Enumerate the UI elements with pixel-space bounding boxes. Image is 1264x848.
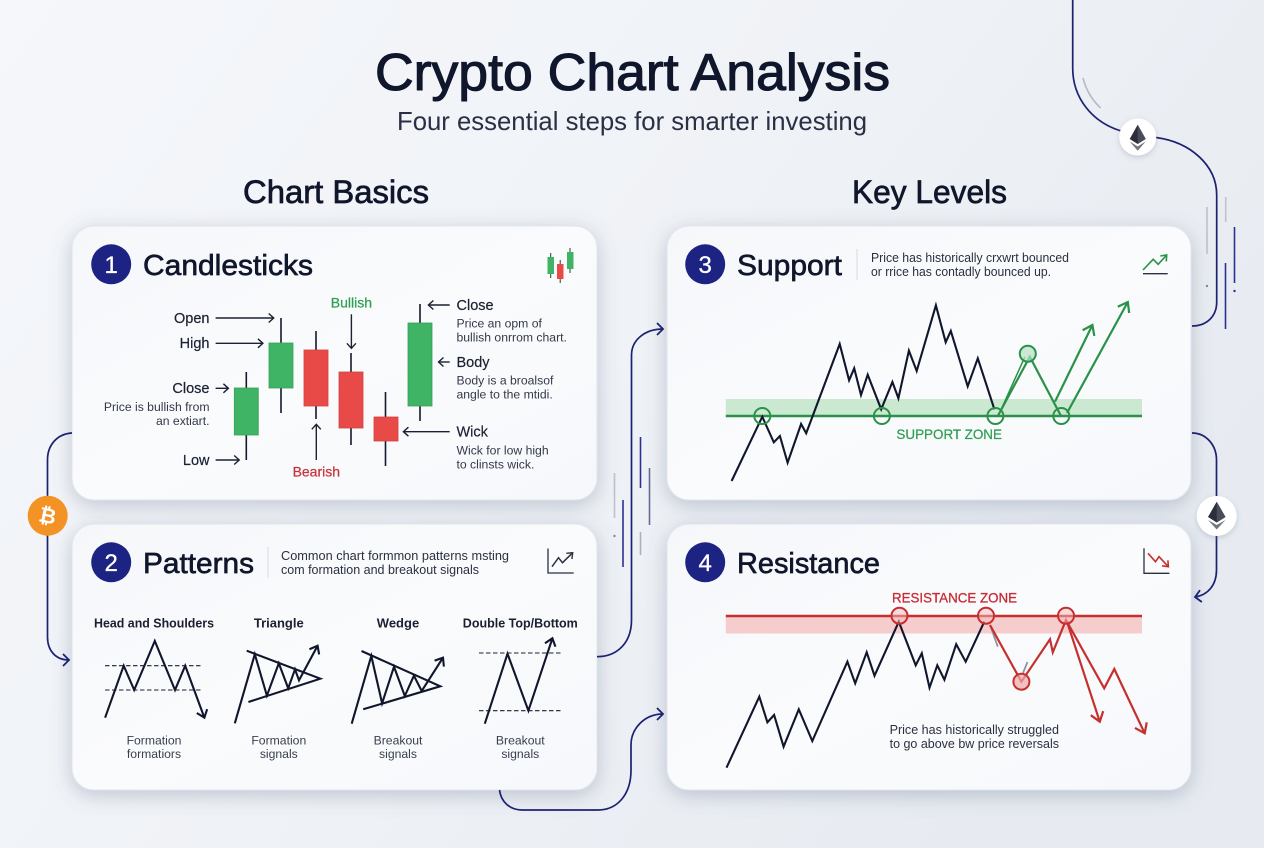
pattern: double top/bottom: Breakout <box>496 734 545 748</box>
right labels: Body <box>456 355 490 371</box>
label: support zone: SUPPORT ZONE <box>896 426 1002 442</box>
icon: bitcoin <box>28 496 68 536</box>
right labels: Wick for low high <box>456 444 549 458</box>
step number 4 <box>685 542 725 582</box>
arrow: patterns to resistance <box>500 714 663 810</box>
callout arrows <box>216 305 450 460</box>
panel: candlesticks <box>72 226 597 500</box>
pattern: wedge: signals <box>379 747 417 761</box>
right labels: Close <box>456 298 494 314</box>
pattern: head and shoulders <box>94 616 214 761</box>
panel: patterns <box>72 524 597 790</box>
resistance zone band <box>726 616 1142 634</box>
right labels: to clinsts wick. <box>456 458 534 472</box>
panel: support <box>667 226 1191 500</box>
left labels: Open <box>174 311 210 327</box>
arrow: patterns to support <box>597 329 663 657</box>
pattern: wedge: Wedge <box>377 616 419 630</box>
note <box>890 723 1059 751</box>
note: Price has historically struggled <box>890 723 1059 737</box>
right labels <box>456 298 567 472</box>
card background <box>72 524 597 790</box>
step number 1 <box>91 244 131 284</box>
arrow: candlesticks to patterns <box>48 433 72 660</box>
card background <box>72 226 597 500</box>
left labels: High <box>180 336 210 352</box>
price line <box>732 305 994 481</box>
description: Common chart formmon patterns msting <box>281 549 509 563</box>
icon: bitcoin: ₿ <box>37 502 59 530</box>
pattern: head and shoulders: Formation <box>127 734 181 748</box>
price line <box>726 622 984 768</box>
icon: trend up <box>1143 255 1168 274</box>
left labels <box>104 311 210 469</box>
pattern: wedge: Breakout <box>374 734 423 748</box>
label: bullish: Bullish <box>331 294 372 310</box>
pattern: triangle: Triangle <box>254 616 304 630</box>
arrow: support to resistance <box>1192 433 1216 597</box>
description <box>857 249 1069 280</box>
heading: candlesticks: Candlesticks <box>143 250 313 282</box>
right labels: bullish onrrom chart. <box>456 330 567 344</box>
pattern: double top/bottom <box>463 616 578 761</box>
pattern: triangle <box>235 616 320 761</box>
pattern: triangle: signals <box>260 747 298 761</box>
left labels: an extiart. <box>156 414 210 428</box>
icon: chart up <box>548 548 574 573</box>
card background <box>667 226 1191 500</box>
pattern: double top/bottom: Double Top/Bottom <box>463 616 578 630</box>
pattern: double top/bottom: signals <box>501 747 539 761</box>
icon: mini candles <box>548 248 574 283</box>
description: Price has historically crxwrt bounced <box>871 251 1069 265</box>
heading: patterns: Patterns <box>143 548 254 580</box>
bounce arrows <box>998 302 1128 416</box>
pattern: triangle: Formation <box>251 734 306 748</box>
icon: ethereum right <box>1197 496 1237 536</box>
heading: key levels: Key Levels <box>852 174 1007 210</box>
step number 1: 1 <box>105 252 118 279</box>
step number 2 <box>91 542 131 582</box>
support zone band <box>726 399 1142 416</box>
step number 3 <box>685 244 725 284</box>
heading: chart basics: Chart Basics <box>243 174 429 210</box>
right labels: angle to the mtidi. <box>456 388 553 402</box>
rejection lines <box>990 620 1145 733</box>
right labels: Wick <box>456 424 489 440</box>
touch points <box>892 608 1074 690</box>
pattern: wedge <box>352 616 443 761</box>
left labels: Price is bullish from <box>104 400 210 414</box>
title: Crypto Chart Analysis <box>375 44 890 102</box>
pattern: head and shoulders: formatiors <box>127 747 181 761</box>
left labels: Close <box>172 381 210 397</box>
pattern: head and shoulders: Head and Shoulders <box>94 616 214 630</box>
arrow: top right connector into support <box>1073 0 1217 326</box>
step number 3: 3 <box>699 252 712 279</box>
description: or rrice has contadly bounced up. <box>871 265 1051 279</box>
note: to go above bw price reversals <box>890 737 1059 751</box>
icon: trend down <box>1144 548 1169 573</box>
panel: resistance <box>667 524 1191 790</box>
icon: ethereum top <box>1119 118 1156 156</box>
touch points <box>754 346 1069 424</box>
card background <box>667 524 1191 790</box>
step number 2: 2 <box>105 550 118 577</box>
label: bearish: Bearish <box>293 464 340 480</box>
subtitle: Four essential steps for smarter investing <box>397 106 867 136</box>
decorative connector strokes top right <box>613 78 1236 567</box>
candlestick chart <box>234 304 432 466</box>
description <box>268 547 509 578</box>
description: com formation and breakout signals <box>281 563 479 577</box>
right labels: Body is a broalsof <box>456 374 554 388</box>
heading: support: Support <box>737 250 842 282</box>
heading: resistance: Resistance <box>737 548 880 580</box>
left labels: Low <box>183 453 210 469</box>
right labels: Price an opm of <box>456 316 542 330</box>
step number 4: 4 <box>699 550 712 577</box>
label: resistance zone: RESISTANCE ZONE <box>892 590 1017 606</box>
